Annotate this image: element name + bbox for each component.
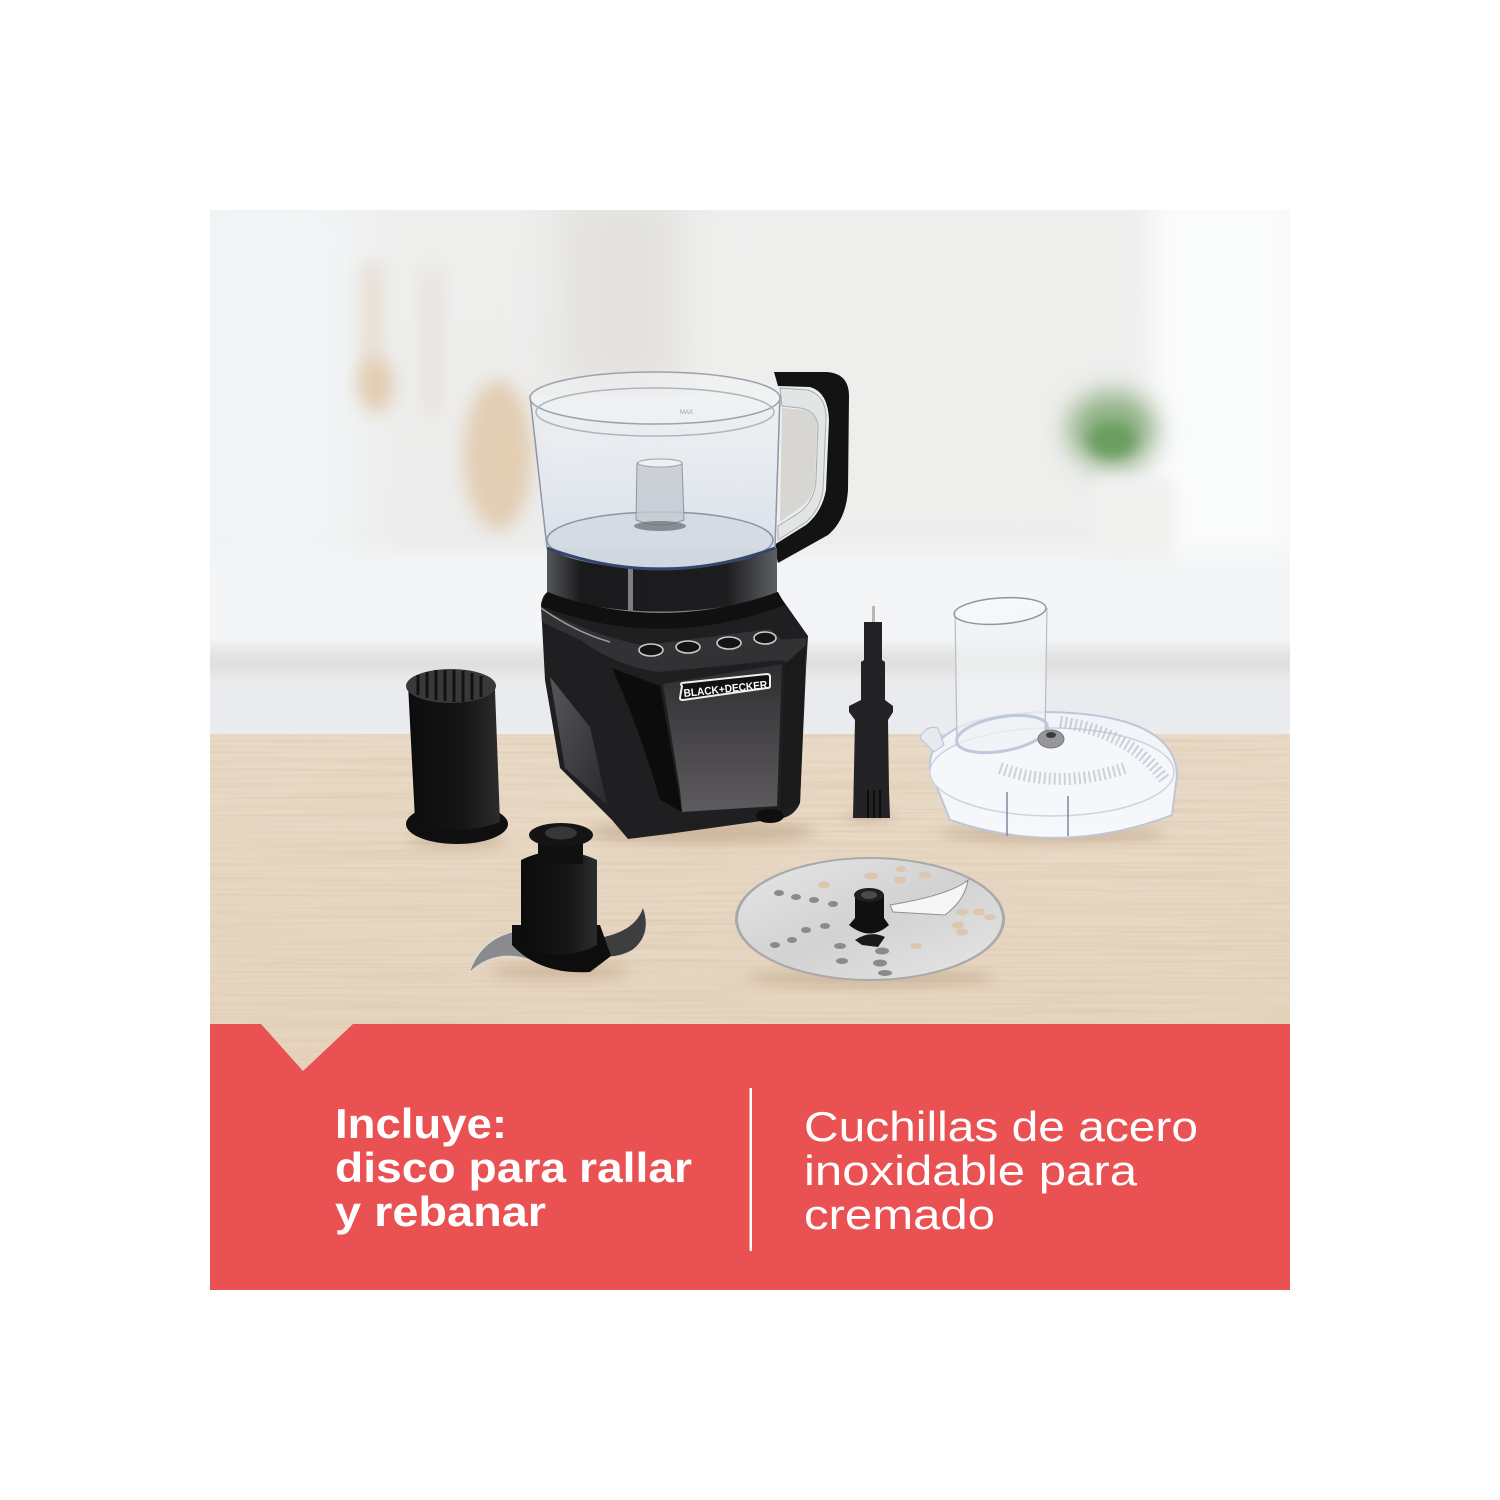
- clear work bowl: MAX: [680, 410, 693, 416]
- heading: included disc: y rebanar: [335, 1188, 546, 1235]
- base shoulder: [541, 608, 806, 672]
- chopping blade: [469, 823, 646, 973]
- text block: stainless steel blades: [804, 1103, 1198, 1238]
- front panel: [663, 664, 782, 812]
- food processor: [530, 372, 849, 839]
- drive spindle: [849, 606, 893, 818]
- feed tube: [956, 652, 1046, 744]
- blurred kitchen background: [210, 210, 1290, 734]
- slicing and shredding disc: [735, 857, 1005, 981]
- wooden table: [210, 734, 1290, 1076]
- panel: red caption band: [210, 1024, 1290, 1290]
- control buttons: [638, 629, 782, 657]
- photo: kitchen scene: [180, 180, 1310, 1076]
- contact shadows: [407, 810, 1167, 986]
- clear work bowl: [530, 372, 780, 569]
- disc blade slot: [890, 880, 968, 915]
- brand badge: BLACK+DECKER: [683, 679, 768, 700]
- handle: [774, 372, 849, 563]
- heading: included disc: Incluye:: [335, 1100, 507, 1147]
- clear lid with feed tube: [920, 595, 1177, 838]
- base feet: [756, 809, 784, 823]
- heading: included disc: disco para rallar: [335, 1144, 692, 1191]
- motor collar: [547, 548, 777, 616]
- heading: included disc: [335, 1100, 692, 1235]
- bowl floor: [547, 512, 773, 568]
- text block: stainless steel blades: inoxidable para: [804, 1147, 1138, 1194]
- motor base: [541, 592, 808, 839]
- lid hub: [1038, 730, 1064, 748]
- divider: [750, 1088, 752, 1251]
- text block: stainless steel blades: Cuchillas de acero: [804, 1103, 1198, 1150]
- center post: [636, 460, 684, 525]
- lower left side panel: [550, 677, 607, 805]
- food pusher: [406, 669, 508, 844]
- text block: stainless steel blades: cremado: [804, 1191, 995, 1238]
- disc hub: [849, 895, 889, 934]
